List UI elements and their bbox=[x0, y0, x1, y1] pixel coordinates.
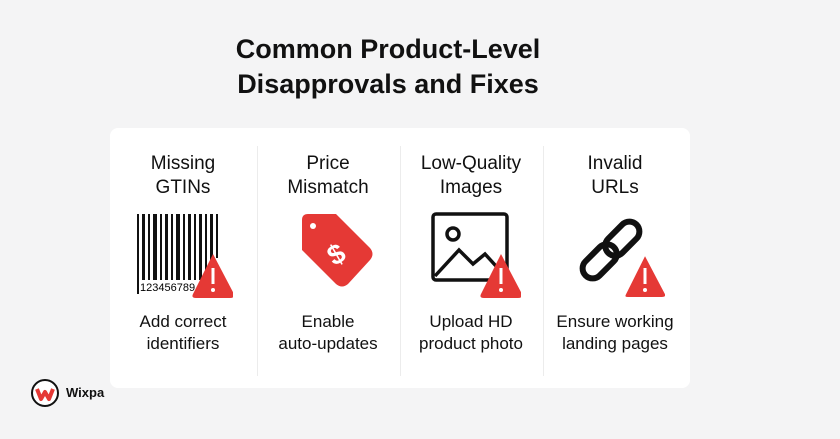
caption bbox=[140, 312, 226, 353]
column: invalid URLs: Invalid bbox=[588, 153, 642, 174]
heading: GTINs bbox=[156, 177, 210, 198]
title: Disapprovals and Fixes bbox=[237, 69, 539, 99]
column: low-quality images: Images bbox=[440, 177, 502, 198]
logo: Wixpa bbox=[66, 385, 104, 400]
icon: barcode with warning bbox=[137, 214, 233, 298]
column: low-quality images: Upload HD bbox=[429, 312, 513, 331]
panel: card bbox=[110, 128, 690, 388]
icon: image with warning bbox=[431, 212, 521, 298]
column: price mismatch: Mismatch bbox=[287, 177, 369, 198]
heading: Missing bbox=[151, 153, 215, 174]
column: invalid URLs: Ensure working bbox=[556, 312, 674, 331]
column: invalid URLs: landing pages bbox=[562, 334, 668, 353]
icon: price tag bbox=[302, 214, 372, 286]
title bbox=[236, 34, 540, 99]
caption: identifiers bbox=[147, 334, 219, 353]
column: low-quality images bbox=[419, 153, 523, 353]
logo bbox=[31, 379, 104, 407]
heading bbox=[151, 153, 215, 198]
title: Common Product-Level bbox=[236, 34, 540, 64]
icon: broken link with warning bbox=[580, 218, 665, 297]
column: low-quality images: Low-Quality bbox=[421, 153, 521, 174]
column: price mismatch: Enable bbox=[302, 312, 354, 331]
column: invalid URLs bbox=[556, 153, 674, 353]
column: missing GTINs bbox=[137, 153, 233, 353]
caption: Add correct bbox=[140, 312, 226, 331]
column: low-quality images: product photo bbox=[419, 334, 523, 353]
column: invalid URLs: URLs bbox=[591, 177, 639, 198]
column: price mismatch: auto-updates bbox=[278, 334, 378, 353]
icon: barcode with warning: 123456789 bbox=[140, 282, 195, 294]
icon: price tag: $ bbox=[322, 237, 351, 272]
column: price mismatch: Price bbox=[306, 153, 350, 174]
column: price mismatch bbox=[278, 153, 378, 353]
